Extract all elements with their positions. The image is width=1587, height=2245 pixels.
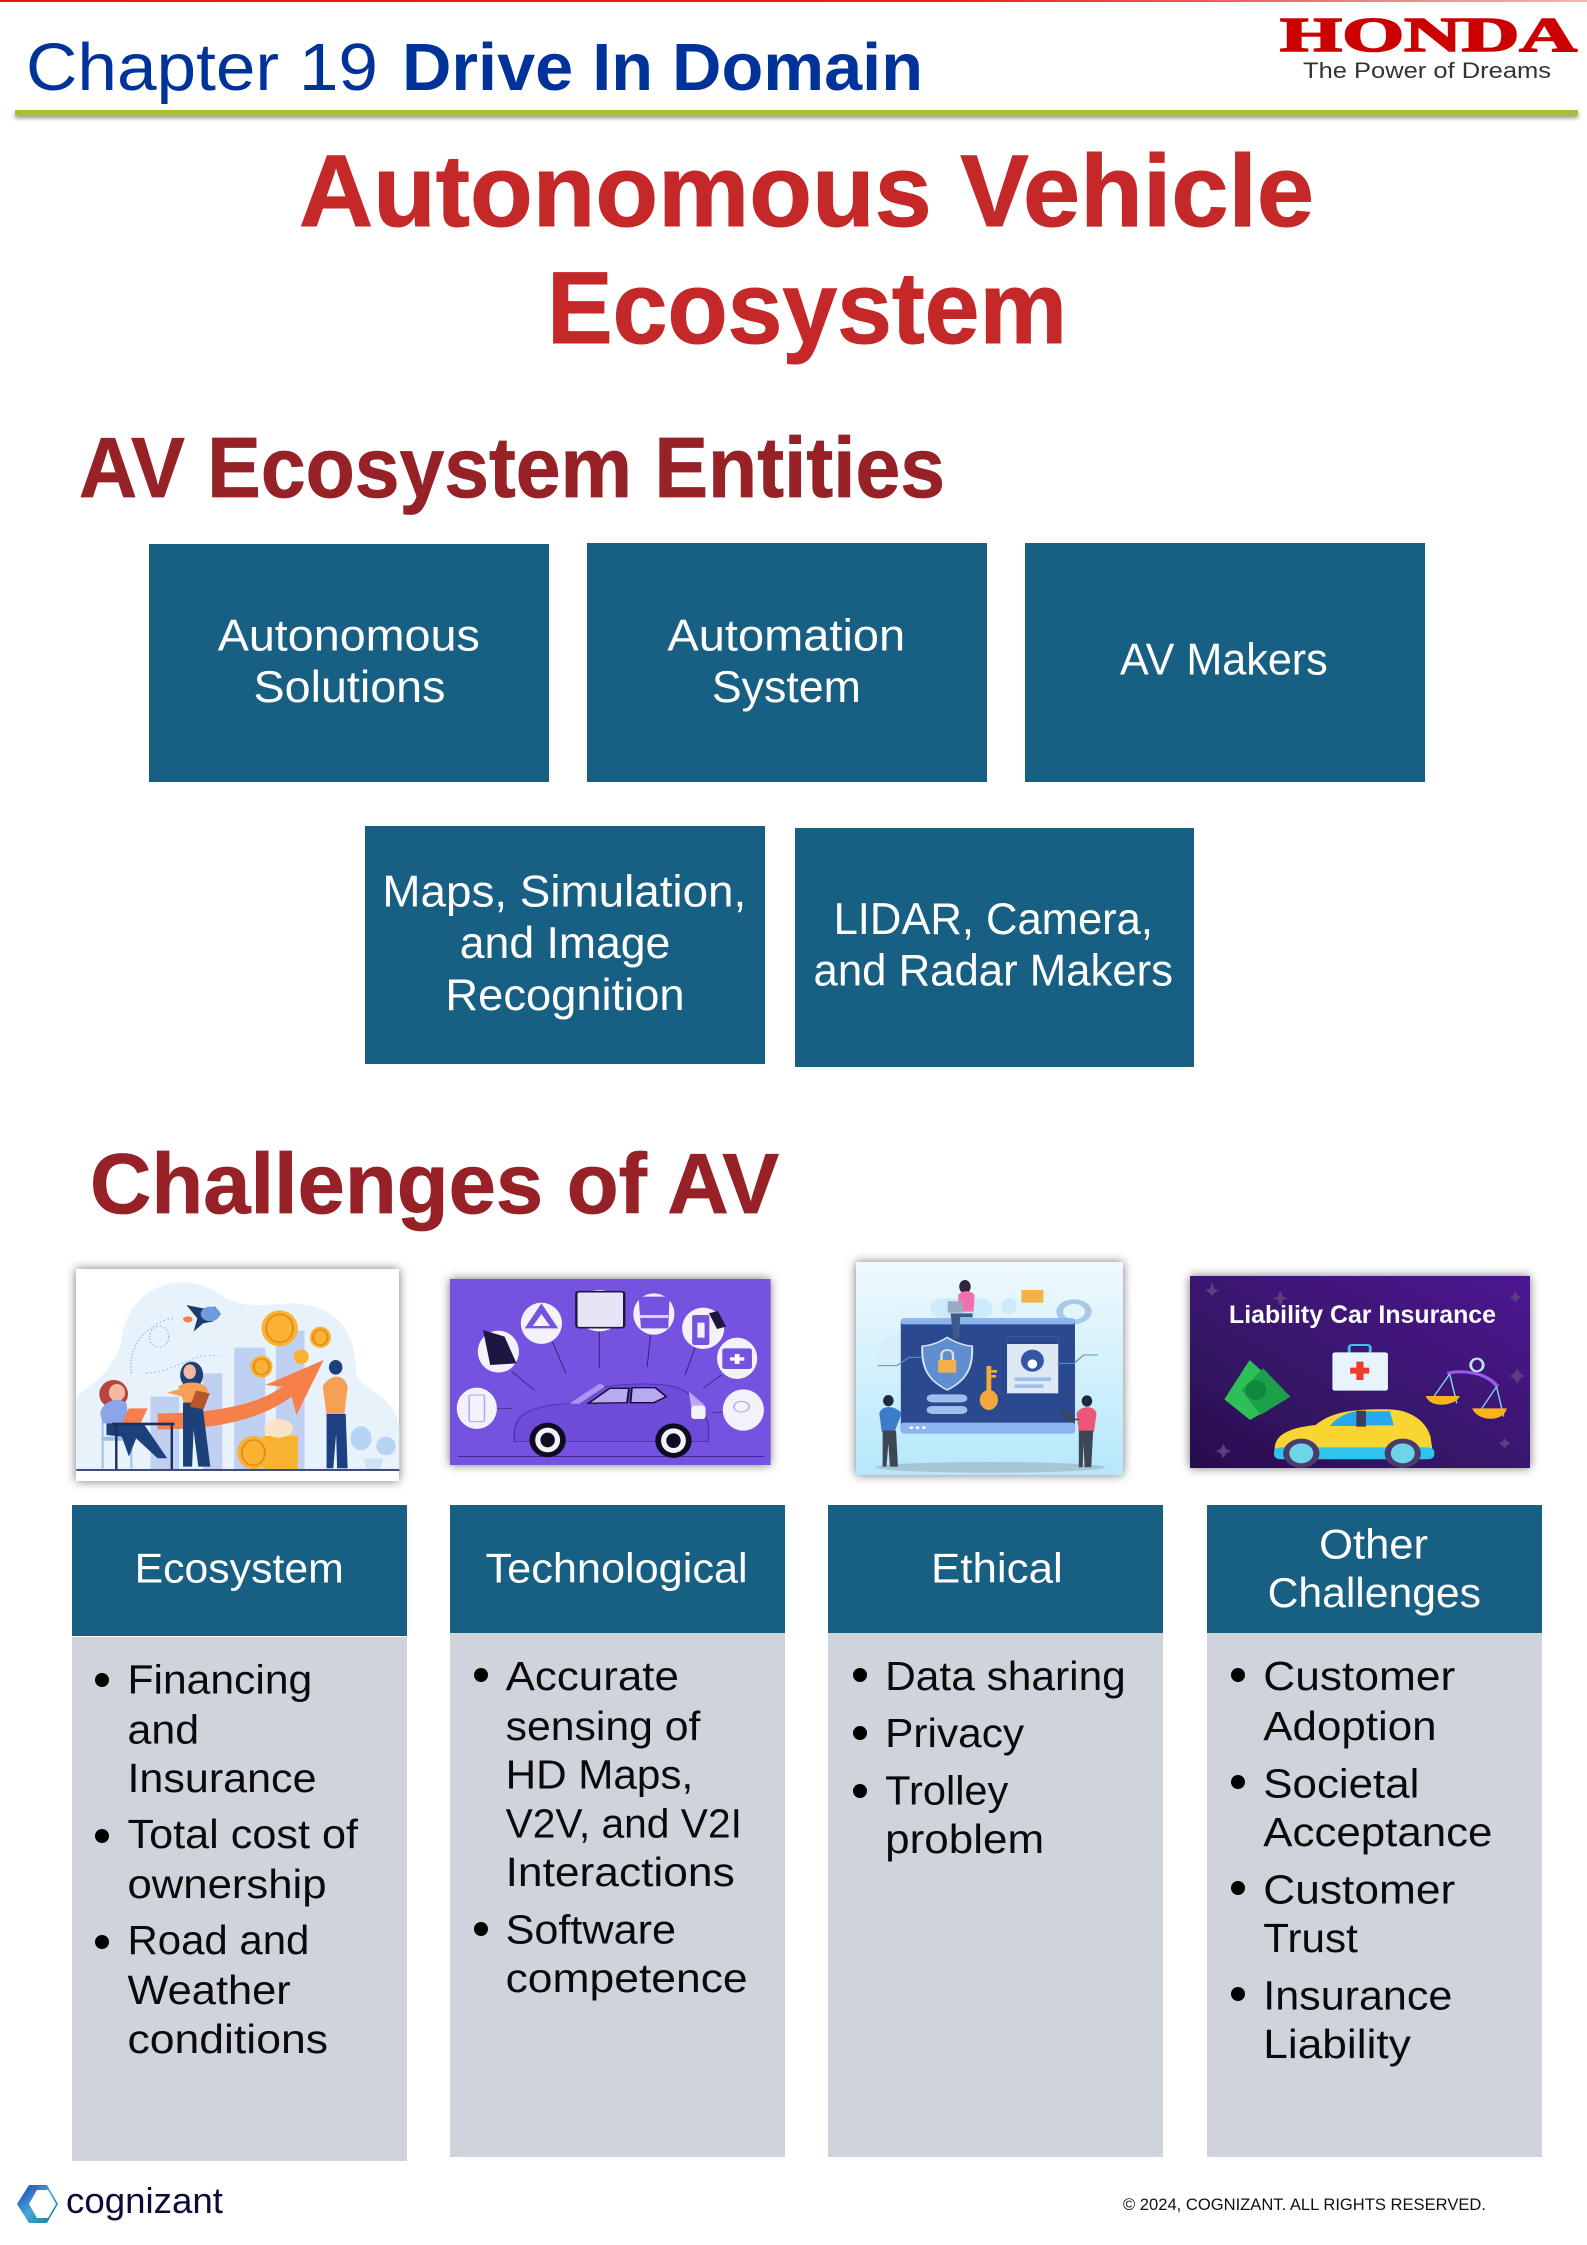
column header: Ecosystem bbox=[72, 1505, 407, 1636]
bullet list: Technological: competence bbox=[506, 1955, 748, 2001]
panel: Ecosystem challenges bbox=[72, 1505, 407, 2161]
panel: Autonomous Solutions: Autonomous bbox=[218, 611, 480, 660]
bullet list: Technological: sensing of bbox=[506, 1703, 701, 1749]
copyright notice: © 2024, COGNIZANT. ALL RIGHTS RESERVED. bbox=[1123, 2196, 1486, 2214]
column header: Technological bbox=[450, 1505, 785, 1633]
panel: Autonomous Solutions: Solutions bbox=[254, 663, 445, 712]
chapter heading: Chapter 19 bbox=[26, 30, 378, 105]
title: Ecosystem bbox=[547, 251, 1067, 365]
bullet list: Ecosystem: ownership bbox=[127, 1861, 327, 1907]
bullet list: Ecosystem: Road and bbox=[127, 1917, 309, 1963]
panel: Maps, Simulation, and Image Recognition: Maps, Simulation, bbox=[382, 868, 746, 917]
bullet list: Other challenges bbox=[1207, 1633, 1542, 2157]
panel: AV Makers: AV Makers bbox=[1120, 636, 1328, 685]
column header: Other Challenges: Other bbox=[1319, 1520, 1428, 1567]
bullet list: Other challenges: Customer bbox=[1263, 1866, 1455, 1912]
bullet list: Ethical: problem bbox=[885, 1816, 1044, 1862]
logo: Honda: HONDA bbox=[1280, 7, 1578, 62]
title: Autonomous Vehicle bbox=[299, 134, 1314, 248]
column header: Ecosystem: Ecosystem bbox=[135, 1545, 344, 1592]
panel: Automation System: Automation bbox=[667, 611, 905, 660]
panel: Autonomous Solutions bbox=[149, 544, 549, 782]
top red line bbox=[0, 0, 1587, 2]
panel: Maps, Simulation, and Image Recognition: and Image bbox=[460, 919, 670, 968]
panel: Technological challenges bbox=[450, 1505, 785, 2157]
column header: Ethical: Ethical bbox=[931, 1545, 1063, 1592]
bullet list: Other challenges: Customer bbox=[1263, 1653, 1455, 1699]
panel: LIDAR, Camera, and Radar Makers: and Radar Makers bbox=[814, 946, 1173, 995]
bullet list: Ecosystem: Total cost of bbox=[127, 1811, 359, 1857]
bullet list: Ethical: Privacy bbox=[885, 1710, 1025, 1756]
panel: Ethical challenges bbox=[828, 1505, 1163, 2157]
panel: LIDAR, Camera, and Radar Makers: LIDAR, Camera, bbox=[834, 895, 1153, 944]
bullet list: Other challenges: Adoption bbox=[1263, 1703, 1437, 1749]
chapter heading bbox=[26, 30, 923, 105]
panel: LIDAR, Camera, and Radar Makers bbox=[795, 828, 1194, 1067]
image: ecosystem finance illustration bbox=[76, 1269, 399, 1481]
panel: Maps, Simulation, and Image Recognition: Recognition bbox=[445, 971, 685, 1020]
column header: Technological: Technological bbox=[486, 1545, 748, 1592]
bullet list: Ecosystem: Weather bbox=[127, 1967, 291, 2013]
column header: Other Challenges bbox=[1207, 1505, 1542, 1633]
bullet list: Technological: HD Maps, bbox=[506, 1752, 693, 1798]
bullet list: Technological: Accurate bbox=[506, 1653, 679, 1699]
bullet list: Other challenges: Trust bbox=[1263, 1915, 1358, 1961]
bullet list: Technological bbox=[450, 1633, 785, 2157]
bullet list: Ecosystem: Financing bbox=[127, 1656, 312, 1702]
bullet list: Ecosystem: and bbox=[127, 1706, 199, 1752]
column header: Other Challenges: Challenges bbox=[1268, 1569, 1481, 1616]
logo: Cognizant: cognizant bbox=[66, 2180, 223, 2221]
bullet list: Ethical bbox=[828, 1633, 1163, 2157]
panel: Automation System: System bbox=[712, 663, 861, 712]
chapter heading: Drive In Domain bbox=[402, 30, 923, 105]
panel: Automation System bbox=[587, 543, 987, 782]
image: ethical data security illustration bbox=[856, 1262, 1123, 1475]
bullet list: Ethical: Trolley bbox=[885, 1767, 1009, 1813]
column header: Ethical bbox=[828, 1505, 1163, 1633]
bullet list: Other challenges: Societal bbox=[1263, 1760, 1419, 1806]
bullet list: Technological: V2V, and V2I bbox=[506, 1800, 742, 1846]
panel: AV Makers bbox=[1025, 543, 1425, 782]
image: technological car illustration bbox=[450, 1279, 771, 1465]
bullet list: Ecosystem: Insurance bbox=[127, 1755, 317, 1801]
bullet list: Ecosystem: conditions bbox=[127, 2016, 328, 2062]
logo: Honda bbox=[1280, 7, 1578, 83]
bullet list: Other challenges: Insurance bbox=[1263, 1972, 1452, 2018]
bullet list: Technological: Software bbox=[506, 1906, 676, 1952]
bullet list: Ethical: Data sharing bbox=[885, 1653, 1126, 1699]
panel: Maps, Simulation, and Image Recognition bbox=[365, 826, 765, 1064]
heading: AV Ecosystem Entities: AV Ecosystem Entities bbox=[79, 421, 945, 516]
image: liability car insurance illustration bbox=[1190, 1276, 1530, 1468]
bullet list: Other challenges: Liability bbox=[1263, 2021, 1411, 2067]
panel: Other challenges bbox=[1207, 1505, 1542, 2157]
logo: Honda: The Power of Dreams bbox=[1303, 58, 1551, 83]
title bbox=[299, 134, 1314, 365]
illustration text: Liability Car Insurance bbox=[1229, 1301, 1496, 1329]
heading: Challenges of AV: Challenges of AV bbox=[90, 1137, 779, 1232]
green header rule bbox=[15, 110, 1578, 115]
bullet list: Technological: Interactions bbox=[506, 1849, 735, 1895]
bullet list: Other challenges: Acceptance bbox=[1263, 1809, 1492, 1855]
bullet list: Ecosystem bbox=[72, 1637, 407, 2161]
